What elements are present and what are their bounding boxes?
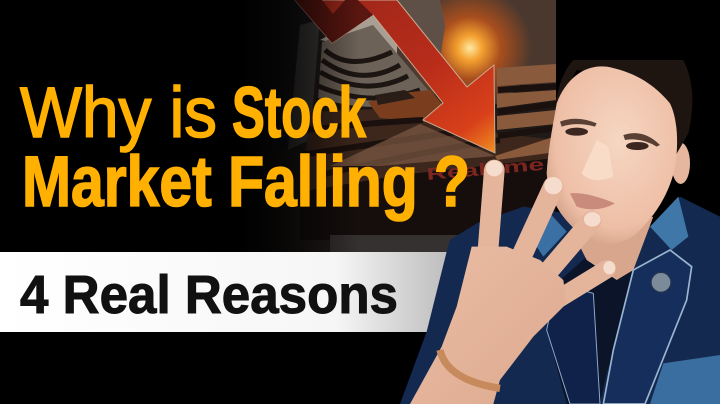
ear [671, 143, 690, 184]
headline [20, 74, 470, 222]
hand and fingers [487, 170, 607, 300]
mouth [570, 193, 615, 209]
eyes [565, 128, 588, 136]
blazer [400, 197, 720, 404]
facade [318, 25, 445, 125]
hair [555, 60, 692, 157]
white banner [0, 252, 448, 332]
eyebrows [560, 119, 597, 127]
explosion [397, 0, 556, 85]
left dark fade [240, 0, 360, 252]
sign on building: Realtime [426, 155, 545, 184]
left lapel [547, 283, 600, 404]
line one: Why is [20, 74, 217, 153]
bracelet [440, 350, 500, 388]
face [547, 66, 677, 244]
dark t-shirt [547, 257, 633, 404]
lapel pin [651, 272, 671, 292]
nose [582, 140, 613, 180]
sky [320, 0, 445, 70]
fingernails [486, 160, 615, 274]
banner text: 4 Real Reasons [20, 265, 398, 325]
red falling arrow [295, 0, 495, 153]
right lapel [603, 250, 692, 404]
line two: Market Falling ? [22, 143, 470, 222]
neck [573, 217, 653, 280]
person [400, 60, 720, 404]
stock exchange building with explosion [240, 0, 556, 252]
dark sign band [300, 158, 556, 240]
denim pocket [650, 355, 720, 404]
denim collar [650, 197, 688, 250]
headline: Stock [232, 74, 366, 153]
